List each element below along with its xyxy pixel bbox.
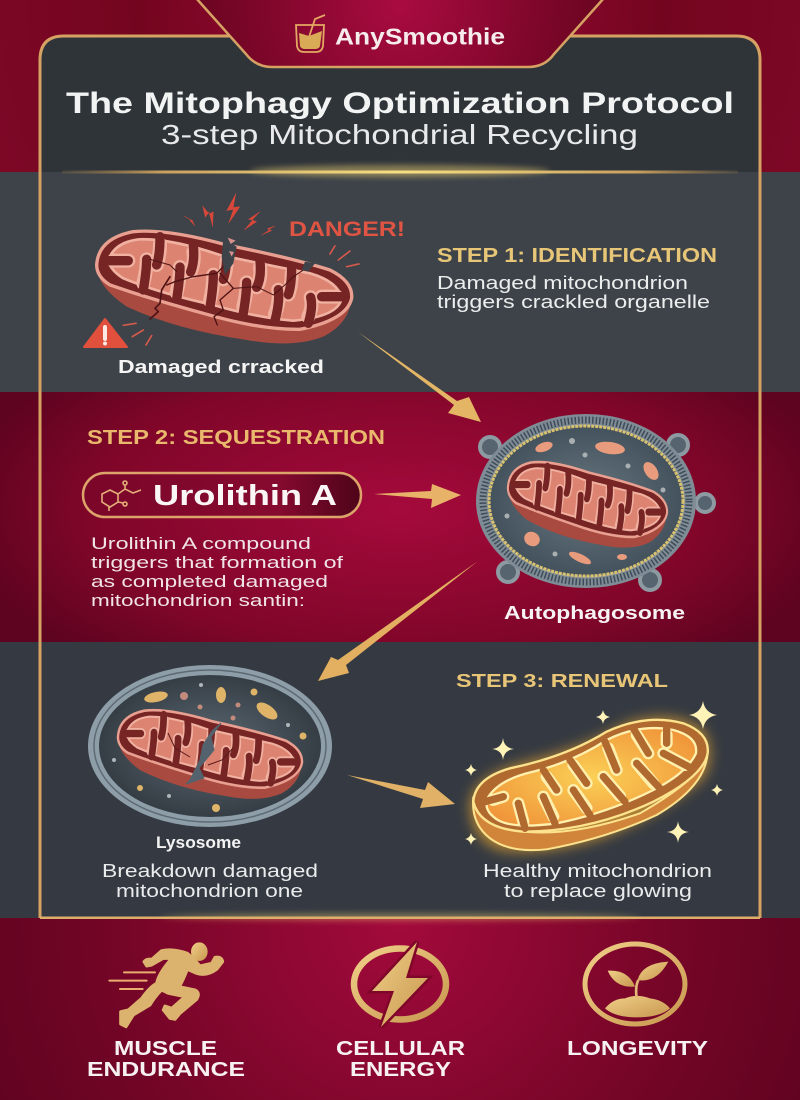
renewal text: to replace glowing <box>504 881 692 901</box>
label: cellular energy <box>336 1038 466 1081</box>
step 1 text: Damaged mitochondrion <box>437 273 688 293</box>
icon: warning triangle <box>84 319 127 347</box>
step 2 text: mitochondrion santin: <box>91 591 305 610</box>
label: cellular energy: ENERGY <box>350 1059 452 1081</box>
step 1 heading: STEP 1: IDENTIFICATION <box>437 245 717 267</box>
panel: benefits <box>87 942 709 1081</box>
step 2 text: as completed damaged <box>91 572 328 591</box>
danger label: DANGER! <box>289 218 405 241</box>
lysosome text <box>102 861 318 901</box>
title: The Mitophagy Optimization Protocol <box>66 87 734 120</box>
icon: lysosome <box>88 665 332 827</box>
label: cellular energy: CELLULAR <box>336 1038 466 1060</box>
panel: step 2 <box>83 427 385 610</box>
label: muscle endurance: MUSCLE <box>114 1038 217 1060</box>
panel: step 1 <box>84 193 717 377</box>
icon: smoothie cup <box>296 15 325 52</box>
icon: damaged mitochondrion <box>97 231 352 343</box>
step 2 text <box>91 534 343 610</box>
label: longevity: LONGEVITY <box>567 1038 709 1060</box>
urolithin label: Urolithin A <box>153 480 337 512</box>
panel: step 3 <box>88 665 723 901</box>
header logo tab <box>196 0 604 67</box>
icon: healthy mitochondrion <box>465 701 723 852</box>
panel: frame <box>40 36 760 918</box>
label: muscle endurance <box>87 1038 245 1081</box>
autophagosome label: Autophagosome <box>504 603 685 623</box>
lysosome label: Lysosome <box>156 833 241 852</box>
step 2 text: Urolithin A compound <box>91 534 311 553</box>
caption: Damaged crracked <box>118 356 324 377</box>
icon: sprout <box>585 944 685 1024</box>
step 1 text: triggers crackled organelle <box>437 292 710 312</box>
urolithin pill <box>83 473 361 517</box>
step 3 heading: STEP 3: RENEWAL <box>456 671 668 691</box>
renewal text: Healthy mitochondrion <box>483 861 712 881</box>
lysosome text: Breakdown damaged <box>102 861 318 881</box>
step 1 text <box>437 273 710 312</box>
lysosome text: mitochondrion one <box>116 881 303 901</box>
icon: molecule <box>102 481 141 511</box>
logo wordmark: AnySmoothie <box>335 24 505 50</box>
label: muscle endurance: ENDURANCE <box>87 1059 245 1081</box>
icon: autophagosome <box>476 414 714 590</box>
renewal text <box>483 861 712 901</box>
arrow: autophagosome to lysosome <box>318 561 478 681</box>
icon: energy bolt <box>354 942 446 1027</box>
subtitle: 3-step Mitochondrial Recycling <box>161 119 638 150</box>
gold divider <box>62 165 738 177</box>
step 2 text: triggers that formation of <box>91 553 343 572</box>
gold divider <box>40 913 760 921</box>
arrow: urolithin to autophagosome <box>374 484 461 508</box>
membrane breach <box>222 238 315 275</box>
icon: runner <box>109 942 223 1027</box>
step 2 heading: STEP 2: SEQUESTRATION <box>87 427 385 449</box>
cracks <box>150 259 308 325</box>
arrow: step 1 to autophagosome <box>358 332 481 422</box>
icon: danger bolts <box>123 193 359 345</box>
arrow: lysosome to renewal <box>347 775 455 808</box>
